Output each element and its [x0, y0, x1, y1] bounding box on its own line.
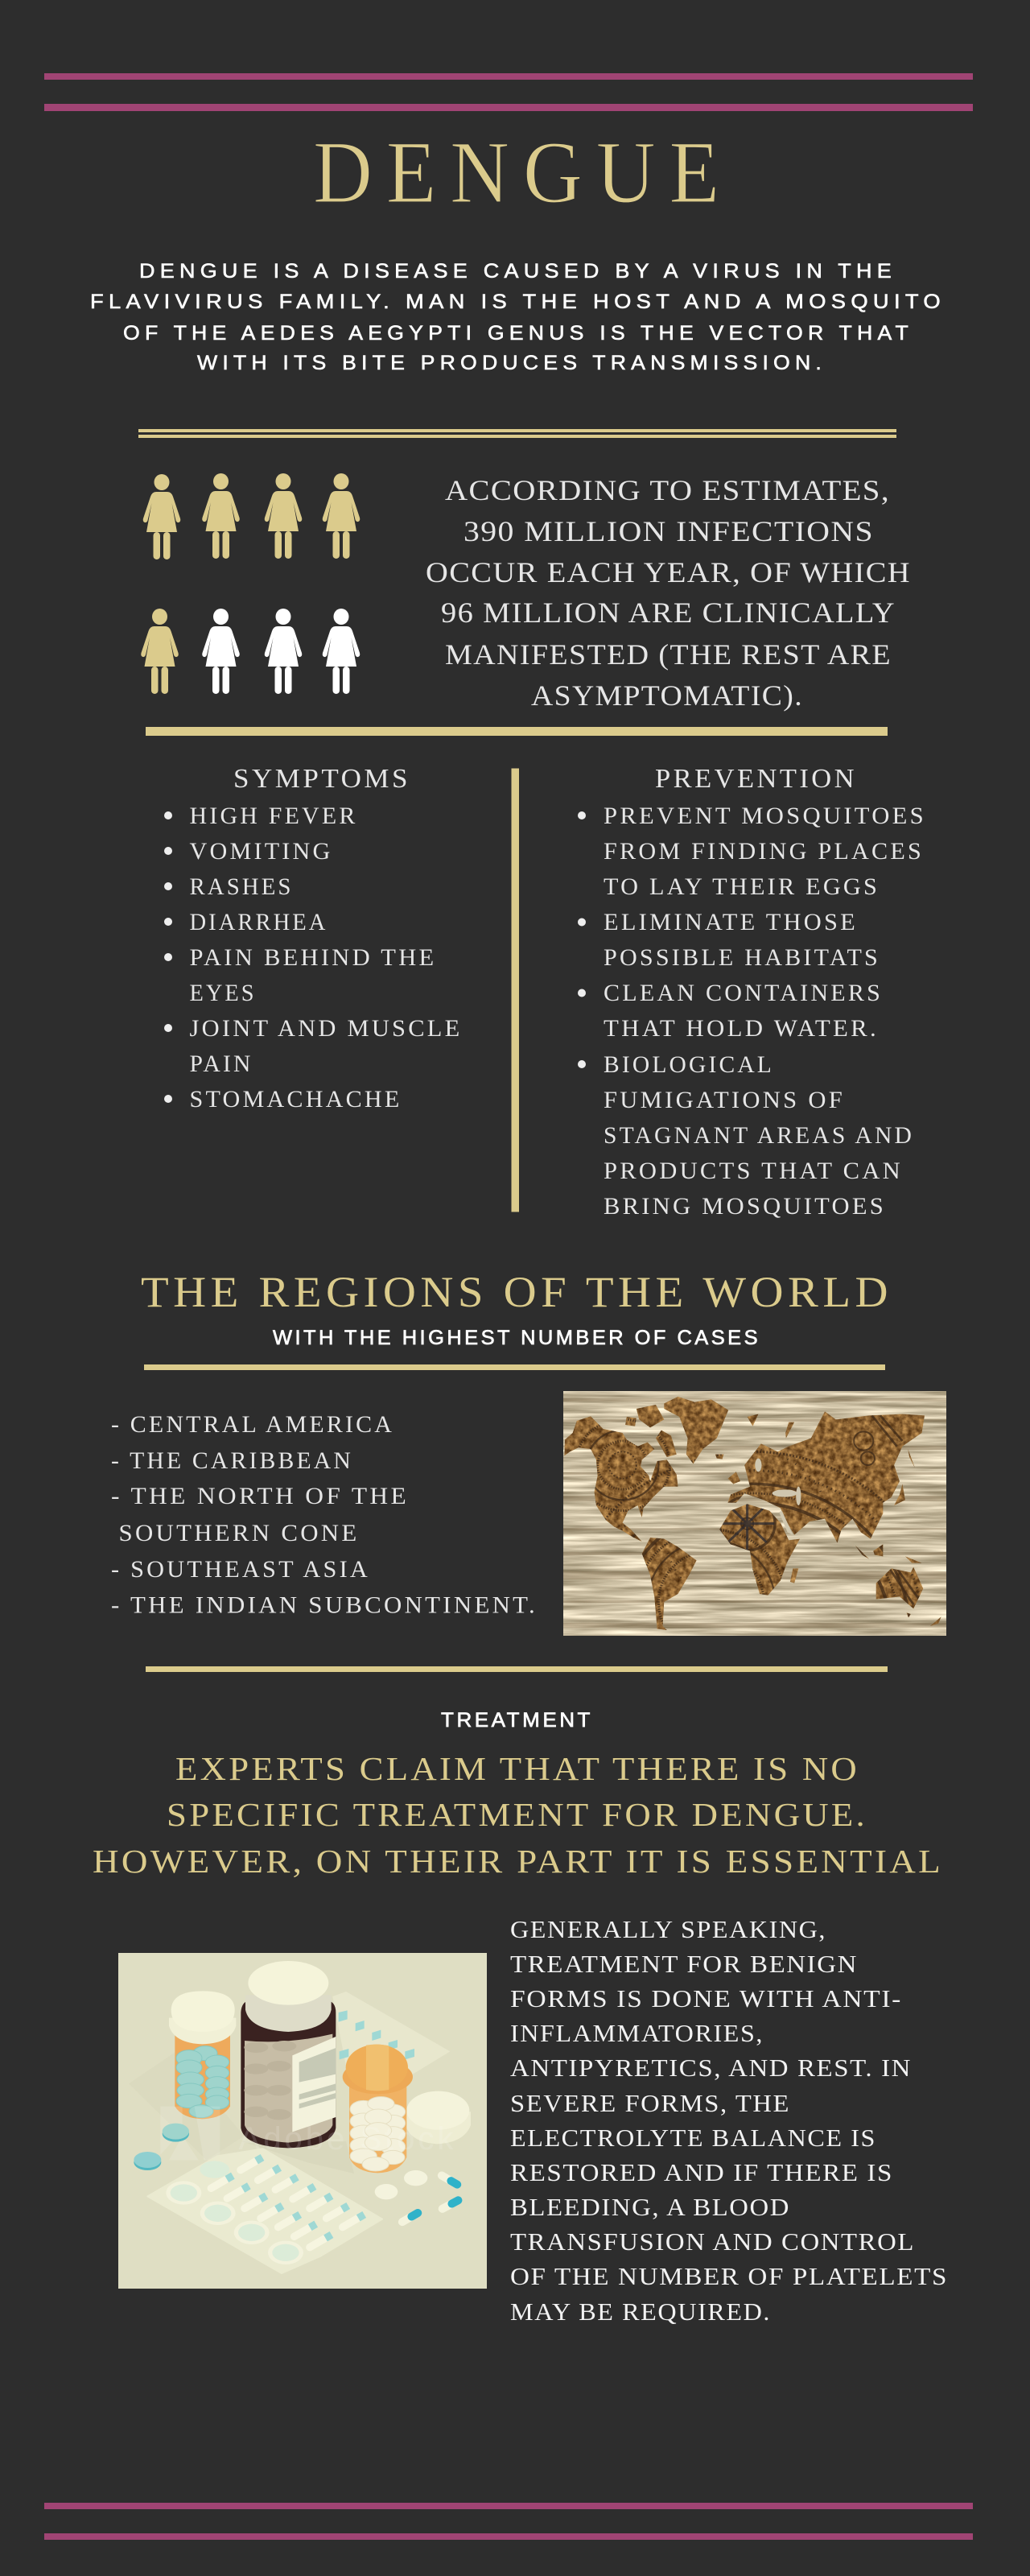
prevention list: BRING MOSQUITOES: [604, 1193, 886, 1220]
loose pills and capsules: [375, 2170, 458, 2222]
treatment body text: MAY BE REQUIRED.: [510, 2297, 771, 2326]
regions list: - THE INDIAN SUBCONTINENT.: [111, 1592, 538, 1618]
prevention list: PRODUCTS THAT CAN: [604, 1158, 903, 1184]
statistic text: 96 MILLION ARE CLINICALLY: [441, 597, 896, 629]
symptoms list: RASHES: [190, 873, 293, 900]
panel: symptoms: [164, 764, 462, 1113]
icon: woman white: [323, 609, 360, 694]
icon: woman gold: [202, 473, 240, 559]
panel: prevention: [578, 764, 926, 1220]
treatment body text: TRANSFUSION AND CONTROL: [510, 2227, 915, 2256]
regions list: SOUTHERN CONE: [119, 1520, 359, 1546]
label: treatment: TREATMENT: [441, 1709, 593, 1732]
treatment statement: [93, 1750, 943, 1880]
teal tablets: [134, 2124, 189, 2170]
symptoms list: JOINT AND MUSCLE: [190, 1015, 462, 1042]
continents: [564, 1397, 941, 1630]
symptoms list: VOMITING: [190, 838, 333, 865]
treatment statement: SPECIFIC TREATMENT FOR DENGUE.: [167, 1796, 867, 1833]
treatment body text: GENERALLY SPEAKING,: [510, 1915, 826, 1943]
icon: woman gold: [323, 473, 360, 559]
prevention list: CLEAN CONTAINERS: [604, 980, 883, 1006]
white cap: [406, 2091, 471, 2144]
prevention list: [578, 803, 926, 1220]
statistic text: ASYMPTOMATIC).: [531, 679, 803, 712]
symptoms list: PAIN: [190, 1051, 253, 1077]
statistic text: MANIFESTED (THE REST ARE: [445, 638, 892, 671]
regions list: - SOUTHEAST ASIA: [111, 1556, 370, 1583]
icon: woman white: [202, 609, 240, 694]
title: DENGUE: [313, 123, 719, 221]
upper blister pack: [332, 1992, 450, 2075]
soft shadows: [129, 2053, 244, 2160]
statistic text: [426, 474, 911, 712]
treatment statement: EXPERTS CLAIM THAT THERE IS NO: [175, 1750, 859, 1787]
treatment body text: INFLAMMATORIES,: [510, 2019, 764, 2047]
prevention list: PREVENT MOSQUITOES: [604, 803, 926, 829]
left bottle with teal pills: [169, 1991, 236, 2119]
right orange bottle with white pills: [343, 2045, 413, 2173]
statistic text: OCCUR EACH YEAR, OF WHICH: [426, 556, 911, 588]
intro text: [90, 260, 946, 374]
icon: woman gold: [265, 473, 302, 559]
intro text: DENGUE IS A DISEASE CAUSED BY A VIRUS IN THE: [139, 260, 896, 283]
treatment body text: ELECTROLYTE BALANCE IS: [510, 2124, 876, 2152]
symptoms list: [164, 803, 462, 1113]
watermark: [160, 2107, 454, 2160]
heading: symptoms: SYMPTOMS: [233, 764, 410, 794]
treatment body text: ANTIPYRETICS, AND REST. IN: [510, 2054, 912, 2082]
regions list: - THE NORTH OF THE: [111, 1483, 409, 1509]
regions list: - CENTRAL AMERICA: [111, 1411, 394, 1438]
symptoms list: STOMACHACHE: [190, 1086, 402, 1113]
prevention list: ELIMINATE THOSE: [604, 909, 858, 935]
statistic text: 390 MILLION INFECTIONS: [464, 515, 874, 547]
prevention list: FROM FINDING PLACES: [604, 838, 924, 865]
heading: prevention: PREVENTION: [655, 764, 857, 794]
symptoms list: EYES: [190, 980, 256, 1006]
prevention list: THAT HOLD WATER.: [604, 1015, 879, 1042]
treatment body text: [510, 1915, 948, 2326]
regions list: [111, 1411, 538, 1618]
regions list: - THE CARIBBEAN: [111, 1447, 353, 1474]
image: medicine bottles and pills: [118, 1953, 487, 2289]
centre jar: [241, 1961, 336, 2148]
prevention list: STAGNANT AREAS AND: [604, 1122, 914, 1149]
symptoms list: HIGH FEVER: [190, 803, 357, 829]
intro text: FLAVIVIRUS FAMILY. MAN IS THE HOST AND A MOSQUITO: [90, 291, 946, 313]
heading: regions of the world: THE REGIONS OF THE WORLD: [141, 1268, 892, 1316]
subheading: highest number of cases: WITH THE HIGHEST NUMBER OF CASES: [273, 1327, 760, 1349]
symptoms list: DIARRHEA: [190, 909, 328, 935]
prevention list: POSSIBLE HABITATS: [604, 944, 880, 971]
lower blister pack: [147, 2149, 382, 2273]
statistic text: ACCORDING TO ESTIMATES,: [445, 474, 890, 506]
icon: woman gold: [143, 474, 180, 559]
treatment body text: SEVERE FORMS, THE: [510, 2089, 790, 2117]
icon: woman gold: [141, 609, 179, 694]
treatment body text: FORMS IS DONE WITH ANTI-: [510, 1984, 902, 2013]
treatment body text: RESTORED AND IF THERE IS: [510, 2158, 893, 2186]
treatment body text: BLEEDING, A BLOOD: [510, 2193, 790, 2221]
icon: woman white: [265, 609, 302, 694]
prevention list: TO LAY THEIR EGGS: [604, 873, 880, 900]
intro text: WITH ITS BITE PRODUCES TRANSMISSION.: [197, 352, 826, 374]
symptoms list: PAIN BEHIND THE: [190, 944, 436, 971]
prevention list: BIOLOGICAL: [604, 1051, 774, 1078]
watermark: Adobe Stock: [239, 2121, 454, 2157]
treatment statement: HOWEVER, ON THEIR PART IT IS ESSENTIAL: [93, 1843, 943, 1880]
image: world map on wood: [563, 1391, 946, 1636]
intro text: OF THE AEDES AEGYPTI GENUS IS THE VECTOR THAT: [123, 322, 913, 345]
treatment body text: OF THE NUMBER OF PLATELETS: [510, 2262, 948, 2290]
prevention list: FUMIGATIONS OF: [604, 1087, 845, 1113]
inland seas: [755, 1459, 801, 1535]
icon group: eight women pictogram: [141, 473, 360, 694]
treatment body text: TREATMENT FOR BENIGN: [510, 1950, 858, 1978]
